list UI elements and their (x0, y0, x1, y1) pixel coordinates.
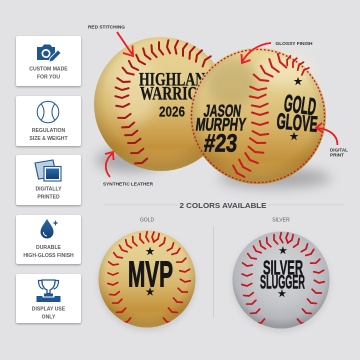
arrow: red stitching (117, 32, 133, 56)
panel: display use only (16, 274, 81, 323)
label: silver: SILVER (272, 218, 290, 224)
stars: ★ (279, 290, 285, 298)
text: jason murphy (195, 102, 249, 134)
callout: digital print: PRINT (330, 152, 344, 158)
stars: ★ (147, 248, 154, 256)
text: gold glove (276, 90, 319, 137)
callout: glossy finish (242, 41, 313, 63)
callout: synthetic leather: SYNTHETIC LEATHER (103, 182, 154, 186)
icon: camera with pencil (37, 44, 61, 62)
text: jason murphy: JASON (203, 102, 242, 120)
callout: red stitching: RED STITCHING (88, 24, 125, 30)
baseball: gold mvp (98, 230, 196, 331)
callout: digital print (316, 123, 348, 158)
red stitching (247, 238, 319, 323)
panel: digitally printed (16, 155, 81, 205)
text: silver slugger: SILVER (263, 258, 303, 280)
text: 2026: 2026 (159, 104, 185, 120)
arrow: synthetic leather (105, 152, 114, 177)
label: regulation: REGULATION (32, 128, 65, 134)
label: display use only: DISPLAY USE (32, 306, 66, 312)
icon: baseball (37, 101, 59, 123)
red stitching (113, 237, 185, 322)
label: display use only: ONLY (42, 314, 56, 320)
red stitching (237, 62, 280, 173)
callout: red stitching (88, 24, 133, 56)
text: gold glove: GLOVE (276, 108, 319, 137)
red stitching (122, 47, 212, 163)
panel: custom made for you (16, 36, 81, 86)
seam around edge (192, 50, 324, 182)
label: custom made: FOR YOU (37, 74, 60, 80)
arrow: digital print (316, 123, 338, 145)
panel: durable high-gloss finish (16, 215, 81, 264)
icon: photos (35, 160, 61, 181)
text: number 23: #23 (203, 130, 238, 157)
heading: 2 colors available: 2 COLORS AVAILABLE (180, 201, 266, 210)
text: highland warriors: WARRIORS (140, 84, 216, 104)
label: regulation: SIZE & WEIGHT (29, 136, 68, 142)
text: gold glove: GOLD (282, 90, 318, 121)
panel: regulation size and weight (16, 96, 81, 146)
label: digitally printed: PRINTED (37, 194, 60, 200)
arrow: glossy finish (242, 43, 271, 63)
stars: ★ (147, 288, 154, 296)
callout: synthetic leather (103, 152, 154, 186)
icon: trophy (36, 280, 60, 302)
callout: digital print: DIGITAL (330, 148, 348, 152)
baseball: jason murphy gold glove (190, 48, 326, 184)
shadows under top baseballs (96, 148, 331, 188)
label: gold: GOLD (140, 218, 154, 224)
label: durable: HIGH-GLOSS FINISH (23, 253, 74, 259)
baseball: silver slugger (232, 232, 330, 332)
text: highland warriors: HIGHLAND (139, 70, 215, 90)
callout: glossy finish: GLOSSY FINISH (276, 41, 313, 46)
baseball: highland warriors (94, 37, 214, 171)
stars: ★ (295, 78, 302, 86)
text: mvp: MVP (128, 254, 173, 294)
stars: ★ (291, 132, 298, 140)
icon: water drop (40, 219, 58, 238)
vertical divider (213, 226, 214, 318)
small stitches upper right (287, 60, 304, 70)
label: durable: DURABLE (36, 245, 62, 251)
baseball: silver slugger: SLUGGER (260, 272, 305, 294)
label: custom made: CUSTOM MADE (29, 66, 68, 72)
label: digitally printed: DIGITALLY (35, 186, 62, 192)
text: jason murphy: MURPHY (195, 115, 247, 134)
stars: ★ (280, 248, 286, 254)
